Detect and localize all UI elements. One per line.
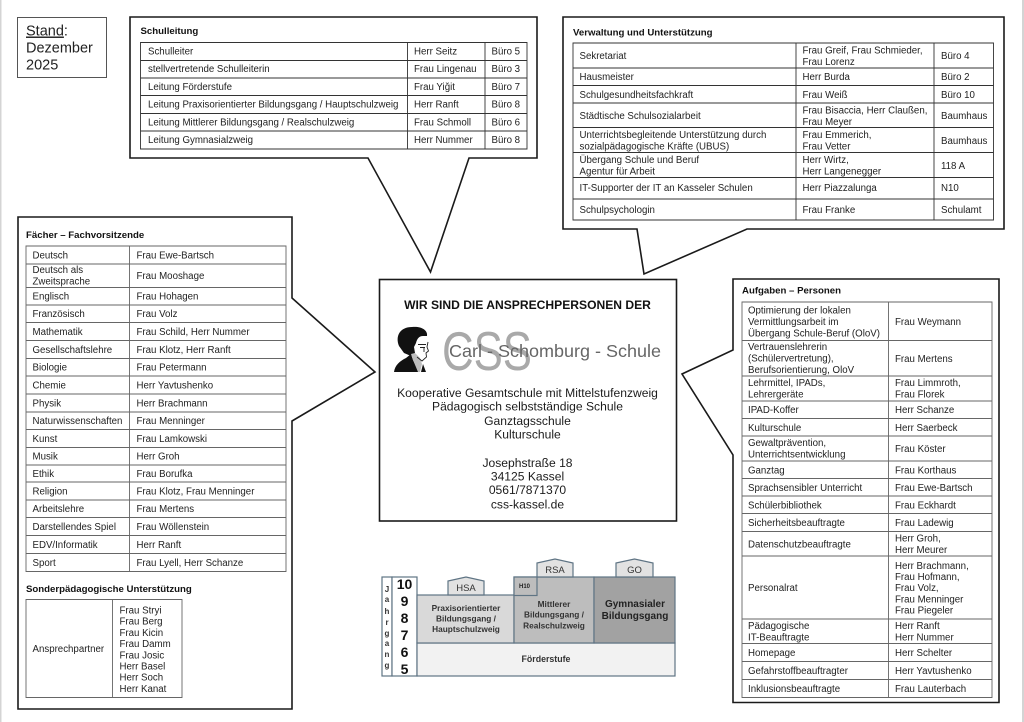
table: Verwaltung bbox=[573, 43, 994, 220]
table: Aufgaben: Frau Piegeler bbox=[895, 606, 954, 616]
table: Fächer: Frau Ewe-Bartsch bbox=[136, 250, 214, 262]
table: Fächer: Darstellendes Spiel bbox=[32, 522, 116, 533]
table: Verwaltung: Frau Meyer bbox=[802, 117, 853, 128]
table: Verwaltung: Baumhaus bbox=[941, 111, 987, 122]
Jahrgang column bbox=[382, 577, 392, 676]
table: Fächer: Ethik bbox=[32, 469, 54, 480]
Mittlerer Bildungsgang: Mittlerer bbox=[538, 599, 571, 609]
table: Aufgaben: Herr Saerbeck bbox=[895, 423, 958, 434]
table: Aufgaben: Unterrichtsentwicklung bbox=[748, 450, 845, 460]
table: Schulleitung: Frau Schmoll bbox=[414, 118, 471, 128]
Gymnasialer Bildungsgang: Bildungsgang bbox=[602, 611, 668, 622]
text: school profile: Pädagogisch selbstständige Schule bbox=[432, 400, 623, 414]
table: Schulleitung: Schulleiter bbox=[148, 46, 194, 58]
text: address: 0561/7871370 bbox=[489, 483, 566, 497]
table: Schulleitung: Herr Seitz bbox=[414, 46, 457, 58]
text: address: Josephstraße 18 bbox=[482, 456, 573, 470]
table: Fächer: Deutsch als bbox=[32, 265, 83, 276]
table: Fächer: Religion bbox=[32, 486, 68, 498]
table: Aufgaben: Pädagogische bbox=[748, 621, 809, 632]
status box: Stand Dezember 2025 bbox=[18, 18, 106, 78]
logo: CSS lettering: CSS bbox=[442, 320, 532, 382]
Praxisorientierter Bildungsgang: Hauptschulzweig bbox=[432, 624, 500, 634]
table: Aufgaben: Inklusionsbeauftragte bbox=[748, 684, 840, 695]
table: Verwaltung: Frau Vetter bbox=[802, 142, 851, 152]
table: Verwaltung: Frau Weiß bbox=[802, 90, 848, 101]
icon: portrait of Carl Schomburg bbox=[394, 327, 428, 372]
table: Sonderpädagogische Unterstützung: Frau Josic bbox=[120, 650, 164, 661]
table: Aufgaben: Frau Lauterbach bbox=[895, 684, 966, 695]
Gymnasialer Bildungsgang: Gymnasialer bbox=[605, 599, 665, 610]
table: Verwaltung: Schulpsychologin bbox=[580, 205, 655, 216]
logo: Carl-Schomburg-Schule: Carl - Schomburg - Schule bbox=[449, 341, 661, 361]
table: Fächer: Frau Menninger bbox=[136, 416, 206, 427]
table: Aufgaben: Frau Weymann bbox=[895, 317, 961, 328]
table: Aufgaben bbox=[742, 302, 992, 698]
grade numbers column: 7 bbox=[401, 627, 409, 643]
table: Schulleitung: Leitung Gymnasialzweig bbox=[148, 135, 253, 146]
table: Schulleitung: Leitung Praxisorientierter Bildungsgang / Hauptschulzweig bbox=[148, 100, 398, 110]
roof: GO: GO bbox=[627, 565, 642, 576]
table: Sonderpädagogische Unterstützung: Frau Kicin bbox=[120, 628, 163, 639]
table: Fächer: Frau Wöllenstein bbox=[136, 522, 209, 533]
roof: RSA bbox=[537, 559, 573, 577]
status box: Stand Dezember 2025: Dezember bbox=[26, 40, 93, 56]
Jahrgang column: g bbox=[385, 661, 390, 670]
grade numbers column: 8 bbox=[401, 610, 409, 626]
table: Aufgaben: Optimierung der lokalen bbox=[748, 306, 851, 316]
table: Sonderpädagogische Unterstützung: Herr Basel bbox=[120, 662, 165, 672]
table: Fächer: Frau Lyell, Herr Schanze bbox=[136, 558, 243, 569]
table: Schulleitung: Herr Ranft bbox=[414, 100, 459, 110]
text: school profile: Kulturschule bbox=[494, 428, 561, 442]
table: Verwaltung: Büro 4 bbox=[941, 51, 970, 62]
table: Aufgaben: Frau Mertens bbox=[895, 354, 953, 365]
table: Verwaltung: Frau Bisaccia, Herr Claußen, bbox=[802, 106, 927, 116]
table: Aufgaben: Frau Ewe-Bartsch bbox=[895, 483, 973, 494]
table: Aufgaben: Frau Korthaus bbox=[895, 466, 957, 476]
table: Sonderpädagogische Unterstützung: Ansprechpartner bbox=[32, 644, 105, 655]
heading: Schulleitung: Schulleitung bbox=[140, 26, 198, 37]
table: Schulleitung: Büro 8 bbox=[492, 100, 520, 110]
table: Aufgaben: Vertrauenslehrerin bbox=[748, 342, 827, 353]
table: Schulleitung: Büro 5 bbox=[492, 46, 520, 58]
table: Aufgaben: Sprachsensibler Unterricht bbox=[748, 483, 862, 494]
table: Aufgaben: Ganztag bbox=[748, 466, 785, 476]
table: Aufgaben: Datenschutzbeauftragte bbox=[748, 540, 851, 550]
table: Fächer: Frau Schild, Herr Nummer bbox=[136, 327, 250, 338]
table: Verwaltung: Sekretariat bbox=[580, 51, 627, 62]
table: Fächer: Herr Groh bbox=[136, 452, 180, 462]
table: Fächer: Gesellschaftslehre bbox=[32, 345, 112, 356]
table: Sonderpädagogische Unterstützung: Herr Kanat bbox=[120, 684, 167, 695]
roof: GO bbox=[616, 559, 653, 577]
table: Verwaltung: Herr Langenegger bbox=[802, 166, 882, 178]
table: Verwaltung: Herr Wirtz, bbox=[802, 155, 849, 166]
H10 box: H10 bbox=[519, 584, 531, 590]
table: Schulleitung: Frau Lingenau bbox=[414, 64, 476, 75]
table: Fächer: Frau Hohagen bbox=[136, 292, 198, 302]
panel: Verwaltung und Unterstützung bbox=[563, 17, 1004, 274]
grade numbers column: 10 bbox=[397, 576, 412, 592]
panel: Aufgaben – Personen bbox=[682, 279, 999, 702]
table: Verwaltung: Büro 10 bbox=[941, 90, 976, 101]
table: Fächer: Chemie bbox=[32, 380, 66, 392]
panel: Fächer und Sonderpädagogische Unterstützung bbox=[18, 217, 375, 709]
table: Fächer: Französisch bbox=[32, 309, 85, 320]
text: school profile bbox=[397, 386, 658, 442]
text: school profile: Kooperative Gesamtschule mit Mittelstufenzweig bbox=[397, 386, 658, 400]
table: Aufgaben: Personalrat bbox=[748, 583, 798, 594]
table: Schulleitung: stellvertretende Schulleiterin bbox=[148, 64, 270, 75]
table: Aufgaben: Vermittlungsarbeit im bbox=[748, 317, 838, 328]
Mittlerer Bildungsgang: Realschulzweig bbox=[523, 620, 585, 630]
table: Fächer: Zweitsprache bbox=[32, 276, 90, 288]
table: Aufgaben: Sicherheitsbeauftragte bbox=[748, 518, 845, 529]
text: school profile: Ganztagsschule bbox=[484, 414, 571, 428]
table: Schulleitung: Leitung Mittlerer Bildungsgang / Realschulzweig bbox=[148, 118, 354, 128]
table: Sonderpädagogische Unterstützung: Frau Berg bbox=[120, 617, 163, 628]
chart: school structure diagram bbox=[382, 559, 675, 677]
table: Fächer: Frau Klotz, Frau Menninger bbox=[136, 486, 255, 498]
heading: Verwaltung und Unterstützung: Verwaltung und Unterstützung bbox=[573, 28, 713, 38]
table: Fächer: Physik bbox=[32, 398, 61, 410]
table: Fächer: Naturwissenschaften bbox=[32, 416, 122, 427]
table: Aufgaben: Lehrmittel, IPADs, bbox=[748, 378, 825, 389]
text: address bbox=[482, 456, 573, 512]
table: Verwaltung: Schulamt bbox=[941, 205, 982, 216]
table: Aufgaben: Frau Ladewig bbox=[895, 518, 954, 529]
status box: Stand Dezember 2025: 2025 bbox=[26, 58, 58, 74]
grade numbers column: 6 bbox=[401, 644, 409, 660]
table: Sonderpädagogische Unterstützung bbox=[26, 600, 182, 698]
table: Schulleitung: Herr Nummer bbox=[414, 135, 473, 146]
table: Fächer bbox=[26, 246, 286, 572]
table: Fächer: Englisch bbox=[32, 292, 69, 302]
table: Fächer: Musik bbox=[32, 452, 58, 462]
table: Aufgaben: Frau Limmroth, bbox=[895, 378, 961, 389]
table: Aufgaben: IPAD-Koffer bbox=[748, 405, 800, 416]
table: Verwaltung: Unterrichtsbegleitende Unterstützung durch bbox=[580, 130, 766, 141]
table: Verwaltung: IT-Supporter der IT an Kasseler Schulen bbox=[580, 183, 753, 194]
table: Sonderpädagogische Unterstützung: Herr Soch bbox=[120, 673, 163, 684]
table: Fächer: Frau Petermann bbox=[136, 362, 206, 374]
Praxisorientierter Bildungsgang: Bildungsgang / bbox=[436, 614, 497, 624]
heading: Sonderpädagogische Unterstützung: Sonderpädagogische Unterstützung bbox=[26, 584, 192, 595]
table: Aufgaben: Herr Groh, bbox=[895, 534, 941, 544]
table: Fächer: Frau Volz bbox=[136, 309, 178, 320]
Jahrgang column: a bbox=[385, 639, 390, 648]
table: Fächer: Frau Borufka bbox=[136, 469, 193, 480]
Mittlerer Bildungsgang bbox=[514, 577, 594, 643]
Jahrgang column: n bbox=[385, 650, 390, 659]
table: Aufgaben: Übergang Schule-Beruf (OloV) bbox=[748, 328, 880, 340]
table: Verwaltung: Hausmeister bbox=[580, 72, 635, 83]
table: Fächer: Deutsch bbox=[32, 250, 68, 262]
table: Fächer: Herr Yavtushenko bbox=[136, 380, 213, 392]
table: Verwaltung: Herr Burda bbox=[802, 72, 850, 83]
table: Aufgaben: Berufsorientierung, OloV bbox=[748, 365, 855, 376]
table: Aufgaben: Homepage bbox=[748, 648, 795, 659]
table: Schulleitung: Büro 3 bbox=[492, 64, 520, 75]
table: Verwaltung: Städtische Schulsozialarbeit bbox=[580, 111, 701, 122]
table: Aufgaben: Kulturschule bbox=[748, 423, 801, 434]
heading: Aufgaben – Personen: Aufgaben – Personen bbox=[742, 286, 841, 296]
table: Aufgaben: Herr Ranft bbox=[895, 621, 940, 632]
table: Aufgaben: Herr Yavtushenko bbox=[895, 666, 972, 677]
table: Schulleitung: Büro 7 bbox=[492, 82, 520, 93]
table: Aufgaben: Herr Nummer bbox=[895, 632, 954, 644]
table: Schulleitung bbox=[140, 42, 527, 149]
Mittlerer Bildungsgang: Bildungsgang / bbox=[524, 610, 585, 620]
table: Verwaltung: Herr Piazzalunga bbox=[802, 183, 877, 194]
table: Verwaltung: Frau Greif, Frau Schmieder, bbox=[802, 46, 923, 56]
table: Fächer: Mathematik bbox=[32, 327, 83, 338]
text: address: css-kassel.de bbox=[491, 498, 564, 512]
grade numbers column: 5 bbox=[401, 661, 409, 677]
table: Aufgaben: Gefahrstoffbeauftragter bbox=[748, 666, 849, 677]
table: Aufgaben: IT-Beauftragte bbox=[748, 632, 809, 644]
roof: HSA: HSA bbox=[456, 583, 476, 594]
grade numbers column: 9 bbox=[401, 593, 409, 609]
Praxisorientierter Bildungsgang bbox=[417, 595, 514, 643]
table: Aufgaben: Schülerbibliothek bbox=[748, 500, 822, 512]
roof: HSA bbox=[448, 577, 484, 595]
heading: Fächer – Fachvorsitzende: Fächer – Fachvorsitzende bbox=[26, 230, 145, 241]
table: Fächer: Frau Lamkowski bbox=[136, 434, 207, 445]
table: Fächer: Kunst bbox=[32, 434, 58, 445]
table: Sonderpädagogische Unterstützung: Frau Stryi bbox=[120, 606, 162, 616]
table: Aufgaben: Frau Volz, bbox=[895, 583, 939, 594]
table: Verwaltung: 118 A bbox=[941, 161, 966, 172]
table: Aufgaben: Herr Schelter bbox=[895, 648, 953, 659]
table: Aufgaben: Herr Brachmann, bbox=[895, 561, 969, 572]
table: Aufgaben: Frau Eckhardt bbox=[895, 500, 956, 512]
table: Fächer: Frau Klotz, Herr Ranft bbox=[136, 345, 231, 356]
Jahrgang column: a bbox=[385, 595, 390, 604]
table: Aufgaben: Herr Schanze bbox=[895, 405, 954, 416]
table: Fächer: Frau Mertens bbox=[136, 504, 194, 515]
table: Verwaltung: Agentur für Arbeit bbox=[580, 166, 655, 178]
table: Aufgaben: Frau Menninger bbox=[895, 594, 964, 606]
table: Verwaltung: Schulgesundheitsfachkraft bbox=[580, 90, 693, 101]
roof: RSA: RSA bbox=[545, 565, 565, 576]
table: Verwaltung: Übergang Schule und Beruf bbox=[580, 155, 699, 166]
table: Fächer: Arbeitslehre bbox=[32, 504, 84, 515]
table: Aufgaben: (Schülervertretung), bbox=[748, 354, 834, 364]
table: Schulleitung: Büro 8 bbox=[492, 135, 520, 146]
table: Fächer: Sport bbox=[32, 558, 56, 569]
table: Verwaltung: Frau Lorenz bbox=[802, 57, 855, 68]
Förderstufe bbox=[417, 643, 675, 676]
Jahrgang column: h bbox=[385, 607, 390, 616]
table: Schulleitung: Büro 6 bbox=[492, 118, 520, 128]
table: Aufgaben: Frau Florek bbox=[895, 390, 945, 400]
table: Schulleitung: Leitung Förderstufe bbox=[148, 82, 232, 93]
table: Fächer: EDV/Informatik bbox=[32, 540, 98, 551]
table: Fächer: Herr Brachmann bbox=[136, 398, 208, 410]
table: Sonderpädagogische Unterstützung: Frau Damm bbox=[120, 639, 171, 650]
Jahrgang column: r bbox=[385, 618, 389, 627]
table: Verwaltung: sozialpädagogische Kräfte (UBUS) bbox=[580, 142, 729, 152]
table: Verwaltung: N10 bbox=[941, 183, 959, 194]
table: Aufgaben: Herr Meurer bbox=[895, 545, 948, 556]
Jahrgang column: J bbox=[385, 585, 389, 594]
table: Verwaltung: Baumhaus bbox=[941, 136, 987, 147]
panel: school information bbox=[380, 280, 676, 521]
table: Verwaltung: Büro 2 bbox=[941, 72, 970, 83]
status box: Stand Dezember 2025: Stand: bbox=[26, 24, 68, 40]
grade numbers column bbox=[392, 576, 417, 677]
text: address: 34125 Kassel bbox=[491, 470, 564, 484]
table: Fächer: Biologie bbox=[32, 362, 67, 374]
Förderstufe: Förderstufe bbox=[522, 654, 571, 664]
table: Verwaltung: Frau Franke bbox=[802, 205, 855, 216]
H10 box bbox=[514, 577, 537, 596]
table: Verwaltung: Frau Emmerich, bbox=[802, 130, 871, 141]
Praxisorientierter Bildungsgang: Praxisorientierter bbox=[432, 603, 501, 613]
table: Aufgaben: Frau Köster bbox=[895, 444, 946, 455]
table: Fächer: Frau Mooshage bbox=[136, 271, 204, 282]
Jahrgang column: g bbox=[385, 629, 390, 638]
table: Aufgaben: Gewaltprävention, bbox=[748, 438, 826, 449]
panel: Schulleitung bbox=[130, 17, 537, 272]
table: Aufgaben: Lehrergeräte bbox=[748, 390, 803, 400]
Gymnasialer Bildungsgang bbox=[594, 577, 675, 643]
table: Aufgaben: Frau Hofmann, bbox=[895, 572, 960, 583]
table: Schulleitung: Frau Yiğit bbox=[414, 82, 455, 93]
table: Fächer: Herr Ranft bbox=[136, 540, 181, 551]
heading: Wir sind die Ansprechpersonen der: WIR SIND DIE ANSPRECHPERSONEN DER bbox=[404, 298, 651, 312]
